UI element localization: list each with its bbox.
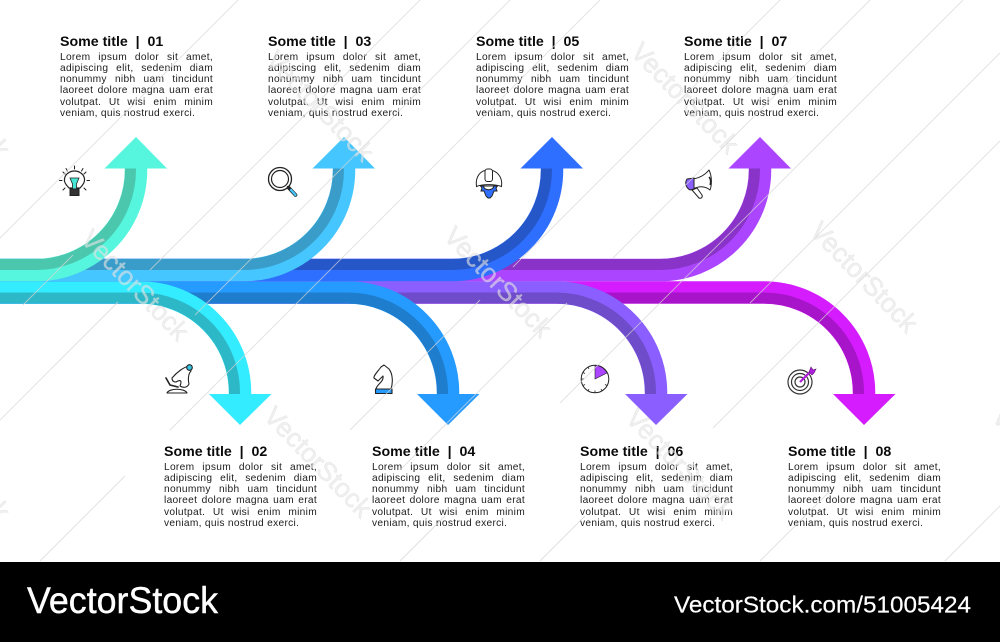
text block 08: volutpat. Ut wisi enim minim	[788, 507, 941, 518]
text block 03: laoreet dolore magna uam erat	[268, 85, 421, 96]
text block 02: adipiscing elit, sedenim diam	[164, 473, 317, 484]
icon: hard hat and gear	[476, 169, 502, 198]
icon: chess knight	[374, 365, 392, 394]
watermark overlay: VectorStock	[804, 216, 924, 339]
text block 04: veniam, quis nostrud exerci.	[372, 518, 507, 529]
text block 06: laoreet dolore magna uam erat	[580, 495, 733, 506]
icon: magnifier	[268, 168, 296, 195]
text block 04: nonummy nibh uam tincidunt	[372, 484, 525, 495]
footer image id text: VectorStock.com/51005424	[674, 592, 971, 618]
arrow 07	[0, 137, 791, 270]
text block 02: volutpat. Ut wisi enim minim	[164, 507, 317, 518]
text block 05: adipiscing elit, sedenim diam	[476, 63, 629, 74]
text block 08: laoreet dolore magna uam erat	[788, 495, 941, 506]
footer logo text: VectorStock	[27, 580, 218, 621]
watermark overlay: VectorStock	[260, 45, 380, 168]
text block 06	[580, 444, 733, 529]
text block 04: laoreet dolore magna uam erat	[372, 495, 525, 506]
watermark overlay: VectorStock	[625, 37, 745, 160]
text block 08: Some title | 08	[788, 444, 891, 460]
watermark overlay: VectorStock	[258, 401, 378, 524]
text block 06: Some title | 06	[580, 444, 683, 460]
text block 04	[372, 444, 525, 529]
text block 07	[684, 34, 837, 119]
arrow 08	[0, 292, 896, 425]
text block 07: veniam, quis nostrud exerci.	[684, 108, 819, 119]
text block 03: nonummy nibh uam tincidunt	[268, 74, 421, 85]
text block 03: volutpat. Ut wisi enim minim	[268, 97, 421, 108]
arrow 05	[0, 137, 583, 270]
text block 03: Some title | 03	[268, 34, 371, 50]
footer bar	[0, 562, 1000, 642]
icon: target and dart	[788, 367, 816, 394]
text block 07: laoreet dolore magna uam erat	[684, 85, 837, 96]
text block 05: nonummy nibh uam tincidunt	[476, 74, 629, 85]
text block 05: laoreet dolore magna uam erat	[476, 85, 629, 96]
text block 05: Lorem ipsum dolor sit amet,	[476, 52, 629, 62]
text block 08: nonummy nibh uam tincidunt	[788, 484, 941, 495]
watermark overlay: VectorStock	[620, 403, 740, 526]
text block 02: Some title | 02	[164, 444, 267, 460]
text block 01	[60, 34, 213, 119]
text block 01: Some title | 01	[60, 34, 163, 50]
text block 05	[476, 34, 629, 119]
text block 08: adipiscing elit, sedenim diam	[788, 473, 941, 484]
text block 02: veniam, quis nostrud exerci.	[164, 518, 299, 529]
text block 07: Lorem ipsum dolor sit amet,	[684, 52, 837, 62]
text block 01: nonummy nibh uam tincidunt	[60, 74, 213, 85]
text block 06: nonummy nibh uam tincidunt	[580, 484, 733, 495]
text block 02: nonummy nibh uam tincidunt	[164, 484, 317, 495]
watermark overlay: VectorStock	[75, 224, 195, 347]
text block 07: adipiscing elit, sedenim diam	[684, 63, 837, 74]
text block 06: veniam, quis nostrud exerci.	[580, 518, 715, 529]
text block 02: Lorem ipsum dolor sit amet,	[164, 462, 317, 472]
text block 08: Lorem ipsum dolor sit amet,	[788, 462, 941, 472]
text block 01: veniam, quis nostrud exerci.	[60, 108, 195, 119]
text block 05: veniam, quis nostrud exerci.	[476, 108, 611, 119]
text block 08	[788, 444, 941, 529]
arrow 03	[0, 137, 375, 270]
text block 02	[164, 444, 317, 529]
text block 03: adipiscing elit, sedenim diam	[268, 63, 421, 74]
text block 03: Lorem ipsum dolor sit amet,	[268, 52, 421, 62]
text block 07: Some title | 07	[684, 34, 787, 50]
text block 06: adipiscing elit, sedenim diam	[580, 473, 733, 484]
text block 02: laoreet dolore magna uam erat	[164, 495, 317, 506]
text block 04: Lorem ipsum dolor sit amet,	[372, 462, 525, 472]
text block 01: Lorem ipsum dolor sit amet,	[60, 52, 213, 62]
text block 07: volutpat. Ut wisi enim minim	[684, 97, 837, 108]
text block 03	[268, 34, 421, 119]
arrow 01	[0, 137, 167, 270]
text block 01: laoreet dolore magna uam erat	[60, 85, 213, 96]
text block 07: nonummy nibh uam tincidunt	[684, 74, 837, 85]
text block 06: Lorem ipsum dolor sit amet,	[580, 462, 733, 472]
icon: clock pie	[581, 365, 609, 393]
watermark overlay: VectorStock	[438, 221, 558, 344]
text block 06: volutpat. Ut wisi enim minim	[580, 507, 733, 518]
text block 03: veniam, quis nostrud exerci.	[268, 108, 403, 119]
text block 04: volutpat. Ut wisi enim minim	[372, 507, 525, 518]
text block 08: veniam, quis nostrud exerci.	[788, 518, 923, 529]
text block 01: volutpat. Ut wisi enim minim	[60, 97, 213, 108]
text block 05: Some title | 05	[476, 34, 579, 50]
icon: light bulb	[60, 166, 90, 196]
text block 01: adipiscing elit, sedenim diam	[60, 63, 213, 74]
icon: megaphone	[686, 170, 711, 198]
arrow 02	[0, 292, 272, 425]
icon: microscope	[166, 365, 192, 393]
text block 04: Some title | 04	[372, 444, 475, 460]
text block 05: volutpat. Ut wisi enim minim	[476, 97, 629, 108]
arrow 04	[0, 292, 480, 425]
text block 04: adipiscing elit, sedenim diam	[372, 473, 525, 484]
arrow 06	[0, 292, 688, 425]
